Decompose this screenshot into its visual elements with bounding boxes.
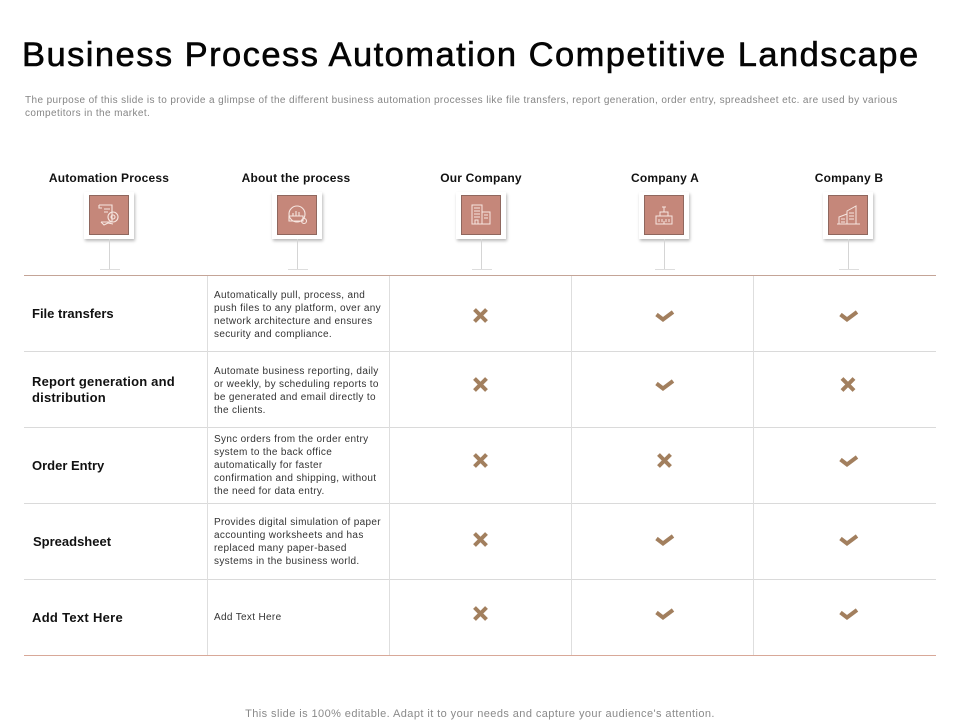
description: Add Text Here: Add Text Here <box>214 612 281 623</box>
description: File transfers: Automatically pull, process, and <box>214 290 365 301</box>
column heading: Company B: Company B <box>815 171 883 185</box>
table grid <box>24 275 936 656</box>
connector stems <box>100 239 859 270</box>
icon card: factory skyline <box>823 192 873 239</box>
column heading: About the process: About the process <box>242 171 350 185</box>
description: Report generation <box>214 366 379 416</box>
intro text: The purpose of this slide is to provide a glimpse of the different business automation processes like file transfers, report generation, order entry, spreadsheet etc. are used by various <box>25 95 898 106</box>
description: Order Entry: automatically for faster <box>214 460 323 471</box>
description: Report generation: Automate business reporting, daily <box>214 366 379 377</box>
row label: Order Entry: Order Entry <box>32 458 104 473</box>
marks: row 3 <box>473 453 858 468</box>
icon card: institution building <box>639 192 689 239</box>
marks: row 2 <box>473 377 856 392</box>
row label: Add Text Here: Add Text Here <box>32 610 123 625</box>
row label: File transfers: File transfers <box>32 306 114 321</box>
description: File transfers: push files to any platform, over any <box>214 303 381 314</box>
row label: Report generation and distribution <box>32 374 175 405</box>
column heading: Automation Process: Automation Process <box>49 171 169 185</box>
icon card: office buildings <box>456 192 506 239</box>
description: Order Entry: confirmation and shipping, without <box>214 473 376 484</box>
intro text: competitors in the market. <box>25 108 150 118</box>
marks: row 5 <box>473 606 858 621</box>
description: Spreadsheet: replaced many paper-based <box>214 543 347 554</box>
marks: row 4 <box>473 532 858 547</box>
title: Business Process Automation Competitive Landscape <box>22 36 920 74</box>
row label: Report generation and distribution: distribution <box>32 390 106 405</box>
icon card: document automation <box>84 192 134 239</box>
description: File transfers: network architecture and ensures <box>214 316 372 327</box>
description: Spreadsheet <box>214 517 381 567</box>
description: Order Entry <box>214 434 376 497</box>
description: Report generation: the clients. <box>214 405 266 416</box>
description: Order Entry: system to the back office <box>214 447 332 458</box>
footer note: This slide is 100% editable. Adapt it to your needs and capture your audience's attention. <box>245 708 715 720</box>
description: Spreadsheet: accounting worksheets and has <box>214 530 364 541</box>
description: Spreadsheet: Provides digital simulation of paper <box>214 517 381 528</box>
description: Report generation: or weekly, by scheduling reports to <box>214 379 379 390</box>
column heading: Company A: Company A <box>631 171 699 185</box>
description: File transfers: security and compliance. <box>214 329 332 340</box>
row label: Spreadsheet: Spreadsheet <box>33 534 111 549</box>
description: Order Entry: the need for data entry. <box>214 486 325 497</box>
description: Order Entry: Sync orders from the order entry <box>214 434 369 445</box>
marks: row 1 <box>473 308 858 323</box>
description: Report generation: be generated and email directly to <box>214 392 376 403</box>
column heading: Our Company: Our Company <box>440 171 522 185</box>
description: File transfers <box>214 290 381 340</box>
row label: Report generation and distribution: Report generation and <box>32 374 175 389</box>
icon card: process globe <box>272 192 322 239</box>
description: Spreadsheet: systems in the business world. <box>214 556 360 567</box>
intro text <box>25 95 898 118</box>
